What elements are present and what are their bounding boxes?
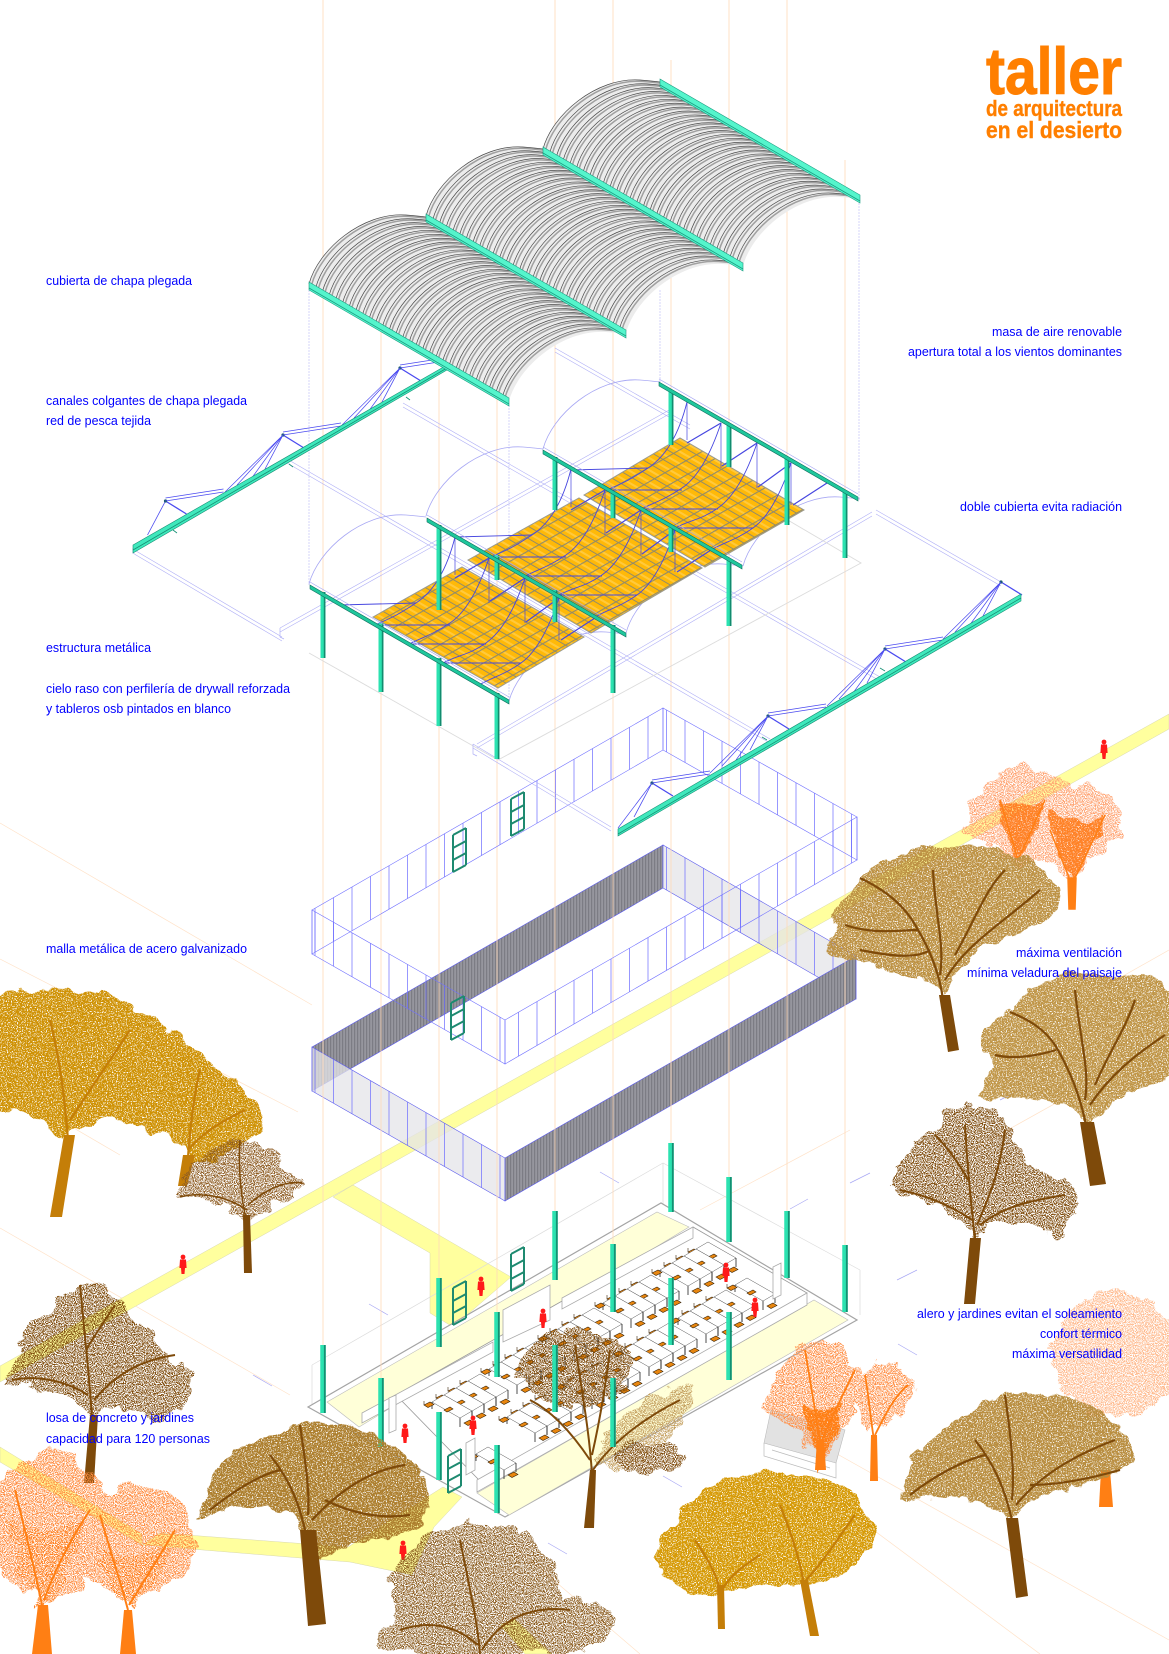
faint building envelope: [312, 1163, 860, 1405]
canales colgantes: right gutter: [618, 580, 1022, 836]
side wall: [663, 845, 856, 999]
left wall: [312, 1047, 505, 1201]
label: mesh: malla metálica de acero galvanizado: [46, 942, 247, 956]
label: double roof: doble cubierta evita radiación: [960, 500, 1122, 514]
title word: taller: taller: [986, 34, 1122, 108]
front garden: [477, 1300, 848, 1515]
ground floor slab, gardens and classroom: [308, 1163, 860, 1517]
title line: en el desierto: en el desierto: [986, 117, 1122, 143]
bottom path: [500, 1618, 552, 1654]
label: comfort: confort térmico: [1040, 1327, 1122, 1341]
tree: centre over classroom: [520, 1330, 693, 1528]
lower tan crown: [592, 1385, 693, 1468]
truss: [618, 580, 1022, 828]
label: slab: losa de concreto y jardines: [46, 1411, 194, 1425]
label: eaves: alero y jardines evitan el soleamiento: [917, 1307, 1122, 1321]
doors exploded: [451, 792, 524, 1040]
beam: [618, 594, 1021, 836]
tree: orange middle right: [767, 1340, 916, 1481]
lower-left path: [0, 1447, 142, 1545]
yellow site paths: [0, 714, 1169, 1654]
site reference lines: [0, 823, 1169, 1654]
title line: de arquitectura: de arquitectura: [986, 96, 1123, 121]
tree: faint orange right: [1053, 1293, 1169, 1507]
tree: brown slim left: [175, 1140, 305, 1273]
hanging cables: [339, 402, 827, 685]
ghost lines of upper levels: [133, 348, 1001, 831]
tree: orange bottom left: [0, 1453, 195, 1654]
tree: tan large lower right: [900, 1392, 1131, 1598]
estructura metálica: frames: [310, 379, 858, 704]
doors on ground floor: [448, 1247, 524, 1493]
classroom deck: [396, 1227, 807, 1480]
lower entrance path: [142, 1487, 462, 1575]
tables row back: [424, 1242, 738, 1427]
branch path to building: [333, 1185, 511, 1327]
upper wire mesh box: [312, 708, 857, 1064]
tree: brown right middle: [887, 1106, 1077, 1304]
label: landscape: mínima veladura del paisaje: [967, 966, 1122, 980]
tables row front: [468, 1278, 777, 1479]
canales colgantes: left gutter: [133, 356, 458, 553]
label: ventilation: máxima ventilación: [1016, 946, 1122, 960]
front dark mesh wall: [505, 956, 856, 1201]
tree: orange top right: [965, 765, 1121, 909]
partition walls: [389, 1263, 781, 1475]
cielo raso: yellow ceiling plates: [373, 438, 804, 688]
estructura metálica: columns: [323, 390, 847, 759]
vertical construction lines: [309, 0, 859, 1378]
back dark mesh wall: [312, 845, 663, 1091]
people: [179, 740, 1108, 1560]
main diagonal path: [0, 714, 1169, 1382]
tree: brown left lower: [5, 1285, 194, 1483]
back garden: [327, 1212, 689, 1427]
cubierta: barrel vault roof: [309, 79, 860, 406]
label: roof: cubierta de chapa plegada: [46, 274, 192, 288]
roof beams: [309, 79, 860, 406]
tree: tan right: [976, 972, 1169, 1186]
label: gutters: canales colgantes de chapa plegada: [46, 394, 247, 408]
low walls: [362, 1227, 807, 1492]
label: opening: apertura total a los vientos dominantes: [908, 345, 1122, 359]
tree: gold bottom centre: [655, 1472, 873, 1636]
tree: gold left big: [0, 989, 262, 1217]
label: net: red de pesca tejida: [46, 414, 151, 428]
tree: brown centre bottom: [375, 1523, 615, 1654]
ground columns: [323, 1143, 847, 1513]
vault sheets: [309, 80, 860, 401]
arcs ghost at structure level: [309, 380, 860, 701]
label: capacity: capacidad para 120 personas: [46, 1432, 210, 1446]
lower mesh box: [312, 845, 856, 1201]
annotation labels left: [46, 274, 290, 1446]
upper brown crown: [520, 1330, 686, 1471]
beam: [133, 365, 447, 553]
label: air mass: masa de aire renovable: [992, 325, 1122, 339]
tree: tan upper right: [831, 845, 1062, 1052]
tree: tan centre left: [197, 1421, 428, 1626]
trunk and branches: [530, 1345, 680, 1528]
title: [986, 34, 1123, 143]
small hut: [764, 1410, 845, 1478]
label: ceiling: cielo raso con perfilería de drywall reforzada: [46, 682, 290, 696]
concrete slab: [308, 1203, 857, 1517]
label: boards: y tableros osb pintados en blanco: [46, 702, 231, 716]
label: versatility: máxima versatilidad: [1012, 1347, 1122, 1361]
label: structure: estructura metálica: [46, 641, 151, 655]
truss: [148, 356, 458, 535]
annotation labels right: [908, 325, 1122, 1361]
